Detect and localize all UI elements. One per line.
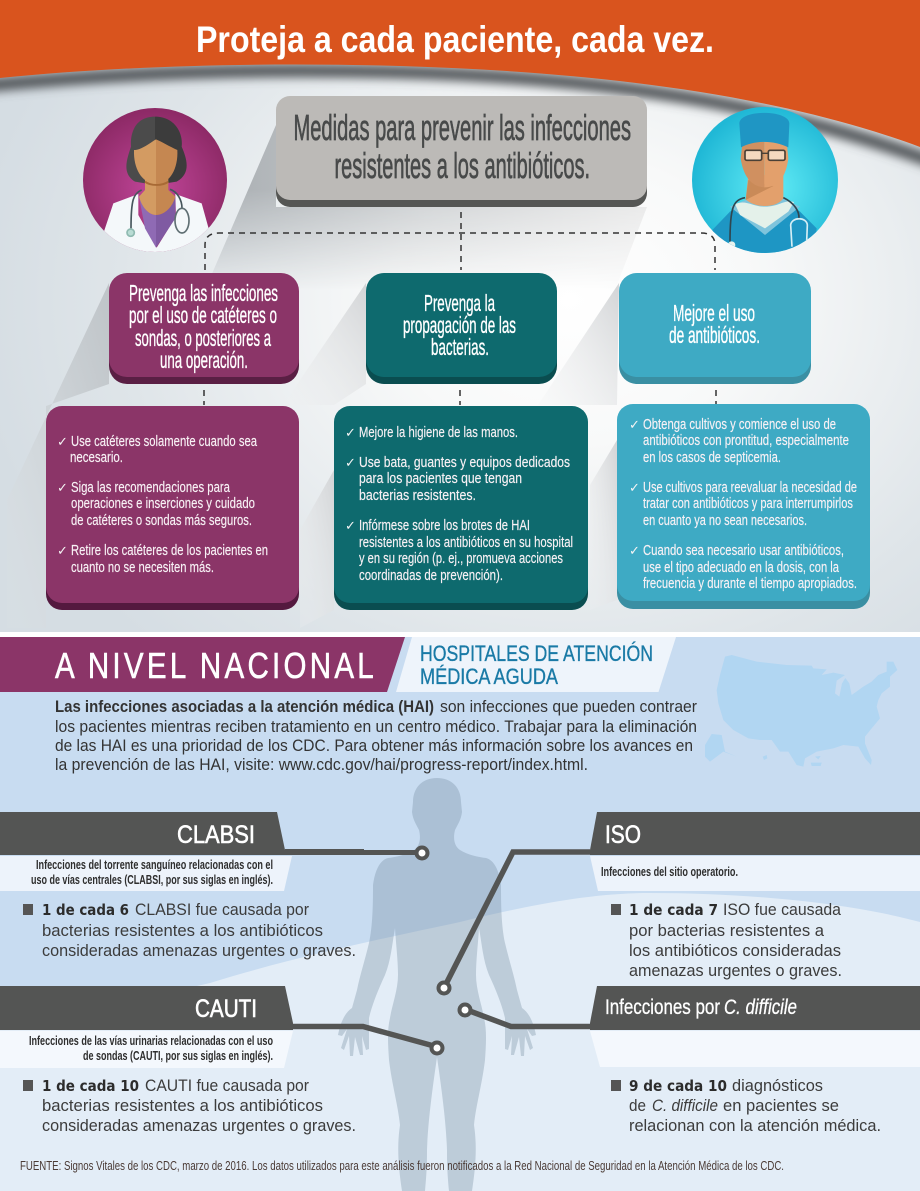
panel: C. difficile: relacionan con la atención médica. <box>629 1117 881 1135</box>
panel: CAUTI: Infecciones de las vías urinarias relacionadas con el uso <box>29 1034 273 1048</box>
subheading: hospitales de atención médica aguda <box>396 637 676 692</box>
panel: antibiotic measures list: Obtenga cultivos y comience el uso de <box>643 417 836 433</box>
panel: ISO: amenazas urgentes o graves. <box>629 962 842 980</box>
panel: spread measures list <box>334 406 588 610</box>
panel: ISO: ISO fue causada <box>723 901 842 919</box>
panel: C. difficile: de <box>629 1097 646 1115</box>
panel: antibiotic measures list: antibióticos con prontitud, especialmente <box>643 433 849 449</box>
panel: spread measures list: resistentes a los antibióticos en su hospital <box>359 535 573 551</box>
intro paragraph: son infecciones que pueden contraer <box>440 697 697 716</box>
intro paragraph: la prevención de las HAI, visite: www.cdc.gov/hai/progress-report/index.html. <box>55 755 588 774</box>
panel: CLABSI: CLABSI <box>177 821 255 849</box>
panel: catheter measures list: Siga las recomendaciones para <box>71 480 231 496</box>
icon: male surgeon avatar <box>692 107 838 257</box>
panel: ISO: los antibióticos consideradas <box>629 942 841 960</box>
panel: antibiotic measures list: en los casos de septicemia. <box>643 450 781 466</box>
panel: CLABSI: uso de vías centrales (CLABSI, por sus siglas en inglés). <box>31 873 273 887</box>
panel: improve antibiotic use heading: de antibióticos. <box>669 322 760 348</box>
panel: catheter measures list: Retire los catéteres de los pacientes en <box>71 543 268 559</box>
intro paragraph: Las infecciones asociadas a la atención médica (HAI) <box>55 697 434 716</box>
icon: map of the United States <box>705 655 897 767</box>
panel: C. difficile: C. difficile <box>652 1097 718 1115</box>
panel: spread measures list: ✓ <box>345 456 356 471</box>
panel: antibiotic measures list: ✓ <box>629 418 640 433</box>
main heading box <box>276 96 647 207</box>
panel: antibiotic measures list: Use cultivos para reevaluar la necesidad de <box>643 480 857 496</box>
panel: prevent catheter infections heading: Prevenga las infecciones <box>129 280 278 306</box>
dashed connectors <box>204 212 716 405</box>
main heading box: Medidas para prevenir las infecciones <box>294 107 631 148</box>
section banner: A nivel nacional: A NIVEL NACIONAL <box>55 645 377 686</box>
panel: catheter measures list <box>46 406 299 610</box>
panel: ISO: Infecciones del sitio operatorio. <box>601 865 738 879</box>
subheading: hospitales de atención médica aguda: HOSPITALES DE ATENCIÓN <box>420 641 653 666</box>
panel: spread measures list: ✓ <box>345 519 356 534</box>
panel: improve antibiotic use heading <box>619 273 811 384</box>
panel: catheter measures list: cuanto no se necesiten más. <box>71 560 214 576</box>
subheading: hospitales de atención médica aguda: MÉDICA AGUDA <box>420 664 558 689</box>
connector: C. difficile to gut <box>460 1004 590 1026</box>
panel: ISO <box>590 812 920 980</box>
panel: C. difficile: Infecciones por <box>605 996 720 1019</box>
panel: CLABSI: consideradas amenazas urgentes o graves. <box>42 942 356 960</box>
panel: prevent spread heading <box>366 273 557 384</box>
national section background <box>0 637 920 1191</box>
panel: catheter measures list: ✓ <box>57 435 68 450</box>
panel: antibiotic measures list: frecuencia y durante el tiempo apropiados. <box>643 576 857 592</box>
panel: prevent catheter infections heading <box>109 273 299 384</box>
main heading box: resistentes a los antibióticos. <box>334 145 590 186</box>
panel: CAUTI: consideradas amenazas urgentes o graves. <box>42 1117 356 1135</box>
panel: antibiotic measures list: ✓ <box>629 481 640 496</box>
panel: prevent spread heading: Prevenga la <box>424 290 495 316</box>
figure: human body silhouette <box>338 778 536 1191</box>
panel: CAUTI: CAUTI fue causada por <box>145 1077 309 1095</box>
panel: prevent catheter infections heading: por el uso de catéteres o <box>129 302 277 328</box>
panel: CAUTI: 1 de cada 10 <box>42 1077 139 1095</box>
panel: spread measures list: Infórmese sobre los brotes de HAI <box>359 518 530 534</box>
top background <box>0 64 920 632</box>
panel: prevent catheter infections heading: sondas, o posteriores a <box>135 325 271 351</box>
intro paragraph: de las HAI es una prioridad de los CDC. Para obtener más información sobre los avances en <box>55 736 693 755</box>
panel: CAUTI: de sondas (CAUTI, por sus siglas en inglés). <box>83 1049 273 1063</box>
panel: spread measures list: ✓ <box>345 426 356 441</box>
title: Proteja a cada paciente, cada vez. <box>196 19 714 60</box>
panel: C. difficile <box>590 986 920 1135</box>
panel: C. difficile: C. difficile <box>724 996 797 1019</box>
orange header banner <box>0 0 920 172</box>
panel: ISO: por bacterias resistentes a <box>629 922 825 940</box>
panel: ISO: ISO <box>605 821 641 849</box>
connector: CAUTI to pelvis <box>293 1026 442 1054</box>
panel: catheter measures list: ✓ <box>57 481 68 496</box>
panel: spread measures list: y en su región (p. ej., promueva acciones <box>359 551 563 567</box>
panel: antibiotic measures list: use el tipo adecuado en la dosis, con la <box>643 560 840 576</box>
panel: ISO: 1 de cada 7 <box>629 901 718 919</box>
panel: CLABSI: CLABSI fue causada por <box>135 901 309 919</box>
panel: spread measures list: Mejore la higiene de las manos. <box>359 425 518 441</box>
panel: prevent spread heading: propagación de las <box>403 312 516 338</box>
panel: CLABSI <box>0 812 356 960</box>
panel: catheter measures list: Use catéteres solamente cuando sea <box>71 434 258 450</box>
panel: antibiotic measures list: tratar con antibióticos y para interrumpirlos <box>643 496 853 512</box>
panel: C. difficile: en pacientes se <box>723 1097 839 1115</box>
panel: CAUTI: bacterias resistentes a los antibióticos <box>42 1097 323 1115</box>
panel: C. difficile: diagnósticos <box>732 1077 823 1095</box>
panel: spread measures list: Use bata, guantes y equipos dedicados <box>359 455 570 471</box>
panel: antibiotic measures list: ✓ <box>629 544 640 559</box>
panel: improve antibiotic use heading: Mejore el uso <box>673 300 755 326</box>
icon: female clinician avatar <box>83 108 227 260</box>
connector: ISO to abdomen <box>438 852 590 994</box>
panel: CLABSI: Infecciones del torrente sanguíneo relacionadas con el <box>36 858 273 872</box>
panel: CLABSI: 1 de cada 6 <box>42 901 129 919</box>
intro paragraph <box>55 697 697 774</box>
panel: antibiotic measures list <box>617 404 870 609</box>
intro paragraph: los pacientes mientras reciben tratamiento en un centro médico. Trabajar para la eliminación <box>55 717 697 736</box>
panel: catheter measures list: necesario. <box>70 450 123 466</box>
panel: spread measures list: bacterias resistentes. <box>359 488 476 504</box>
panel: catheter measures list: operaciones e inserciones y cuidado <box>71 496 255 512</box>
panel: spread measures list: coordinadas de prevención). <box>359 568 503 584</box>
panel: CLABSI: bacterias resistentes a los antibióticos <box>42 922 323 940</box>
panel: antibiotic measures list: Cuando sea necesario usar antibióticos, <box>643 543 844 559</box>
section banner: A nivel nacional <box>0 637 405 692</box>
panel: CAUTI: CAUTI <box>195 995 257 1023</box>
panel: catheter measures list: ✓ <box>57 544 68 559</box>
connector: CLABSI to chest <box>285 848 428 858</box>
panel: catheter measures list: de catéteres o sondas más seguros. <box>71 513 252 529</box>
panel: spread measures list: para los pacientes que tengan <box>359 471 522 487</box>
panel: C. difficile: 9 de cada 10 <box>629 1077 727 1095</box>
panel: prevent spread heading: bacterias. <box>431 334 489 360</box>
panel: CAUTI <box>0 986 356 1135</box>
panel: antibiotic measures list: en cuanto ya no sean necesarios. <box>643 513 807 529</box>
panel: prevent catheter infections heading: una operación. <box>160 347 248 373</box>
